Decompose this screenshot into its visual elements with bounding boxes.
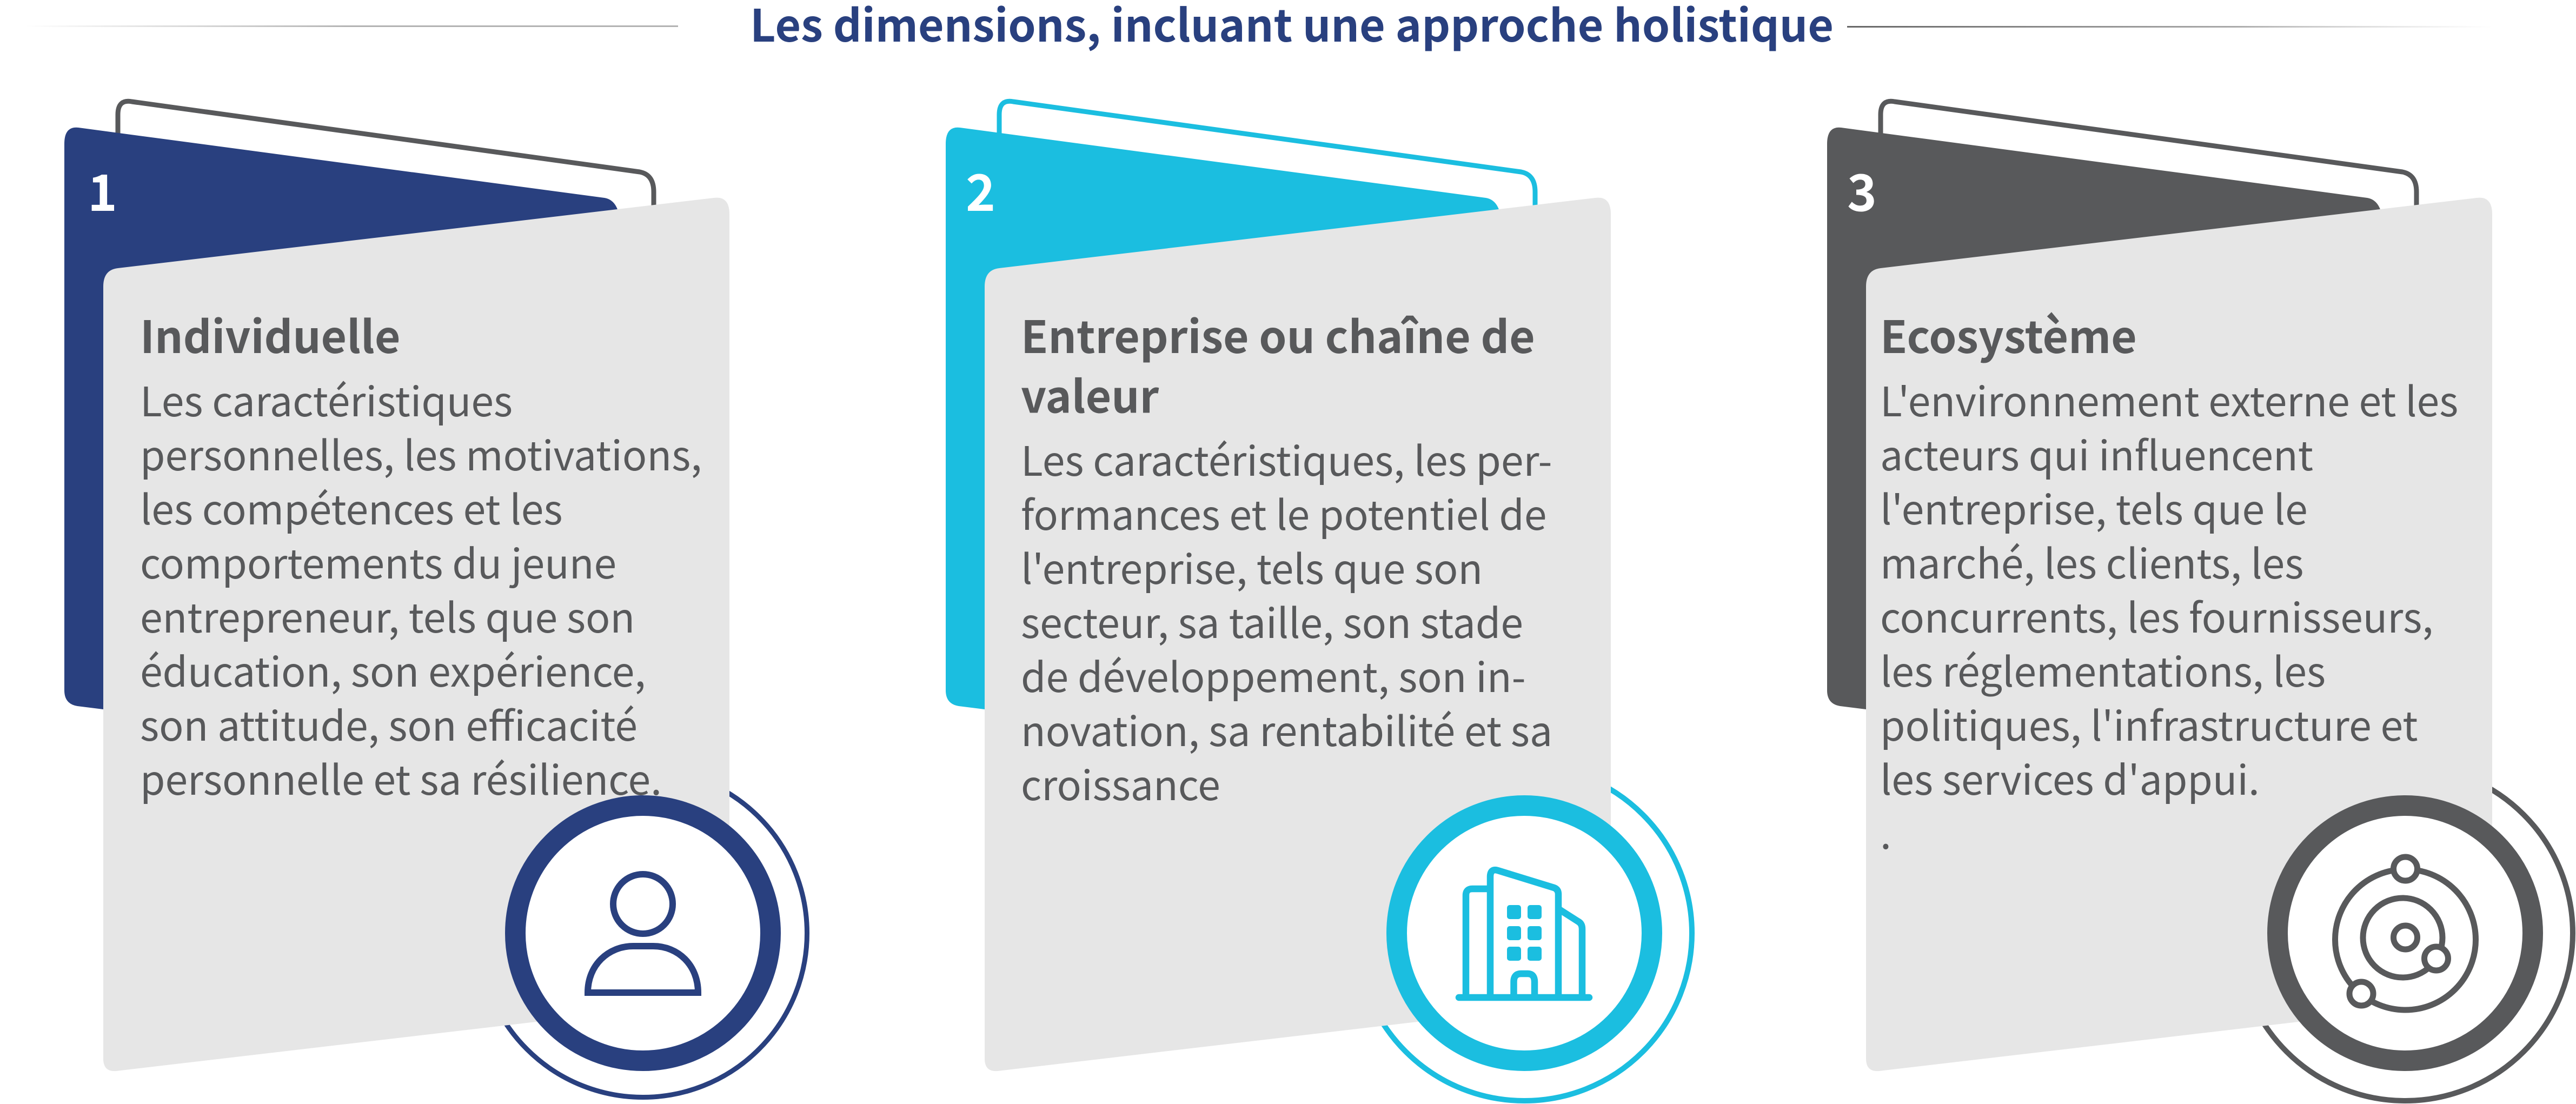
body text: novation, sa rentabilité et sa xyxy=(1021,699,1552,758)
body text: de développement, son in- xyxy=(1021,645,1526,704)
body text xyxy=(1880,369,2458,861)
heading: valeur xyxy=(1021,361,1159,426)
title rule right xyxy=(1847,26,2493,28)
body text: politiques, l'infrastructure et xyxy=(1880,694,2418,753)
heading xyxy=(1021,302,1535,426)
body text: éducation, son expérience, xyxy=(140,640,646,699)
grey card xyxy=(103,198,729,1071)
body text: personnelles, les motivations, xyxy=(140,423,702,482)
dark cover xyxy=(64,128,618,709)
number 1: 1 xyxy=(88,152,117,225)
heading: Entreprise ou chaîne de xyxy=(1021,302,1535,366)
body text: l'entreprise, tels que son xyxy=(1021,537,1483,596)
body text: secteur, sa taille, son stade xyxy=(1021,591,1523,650)
body text: les compétences et les xyxy=(140,477,562,536)
grey card xyxy=(1866,198,2492,1071)
heading: Ecosystème xyxy=(1880,302,2137,366)
back page outline xyxy=(1881,101,2416,216)
body text: L'environnement externe et les xyxy=(1880,369,2458,428)
number 2: 2 xyxy=(966,152,995,225)
body text: les réglementations, les xyxy=(1880,640,2326,699)
icon ring xyxy=(2278,806,2533,1061)
panel: Entreprise ou chaîne de valeur xyxy=(946,101,1692,1101)
heading: Individuelle xyxy=(140,302,401,366)
icon: orbit system xyxy=(2335,857,2475,1010)
cover xyxy=(946,128,1499,709)
body text: marché, les clients, les xyxy=(1880,531,2303,590)
body text: les services d'appui. xyxy=(1880,748,2260,807)
body text: Les caractéristiques xyxy=(140,369,513,428)
icon ring xyxy=(1397,806,1652,1061)
body text xyxy=(1021,429,1552,812)
back page outline xyxy=(999,101,1535,216)
icon: person xyxy=(588,874,698,993)
outer ring xyxy=(1357,766,1692,1101)
outer ring xyxy=(2238,766,2573,1101)
body text: entrepreneur, tels que son xyxy=(140,586,635,644)
body text: concurrents, les fournisseurs, xyxy=(1880,586,2433,644)
body text: personnelle et sa résilience. xyxy=(140,748,662,807)
title rule left xyxy=(25,25,678,27)
body text: . xyxy=(1880,802,1891,861)
body text: Les caractéristiques, les per- xyxy=(1021,429,1552,488)
icon ring xyxy=(515,806,771,1061)
icon: building xyxy=(1459,870,1589,997)
body text: formances et le potentiel de xyxy=(1021,483,1546,542)
panel: Ecosystème xyxy=(1827,101,2573,1101)
panel: Individuelle xyxy=(64,101,807,1098)
body text: son attitude, son efficacité xyxy=(140,694,638,753)
outer ring xyxy=(479,769,807,1098)
body text: acteurs qui influencent xyxy=(1880,423,2313,482)
back page outline xyxy=(118,101,654,216)
body text xyxy=(140,369,702,807)
cover xyxy=(1827,128,2381,709)
body text: comportements du jeune xyxy=(140,531,616,590)
number 3: 3 xyxy=(1847,152,1877,225)
body text: l'entreprise, tels que le xyxy=(1880,477,2308,536)
body text: croissance xyxy=(1021,753,1220,812)
grey card xyxy=(985,198,1611,1071)
